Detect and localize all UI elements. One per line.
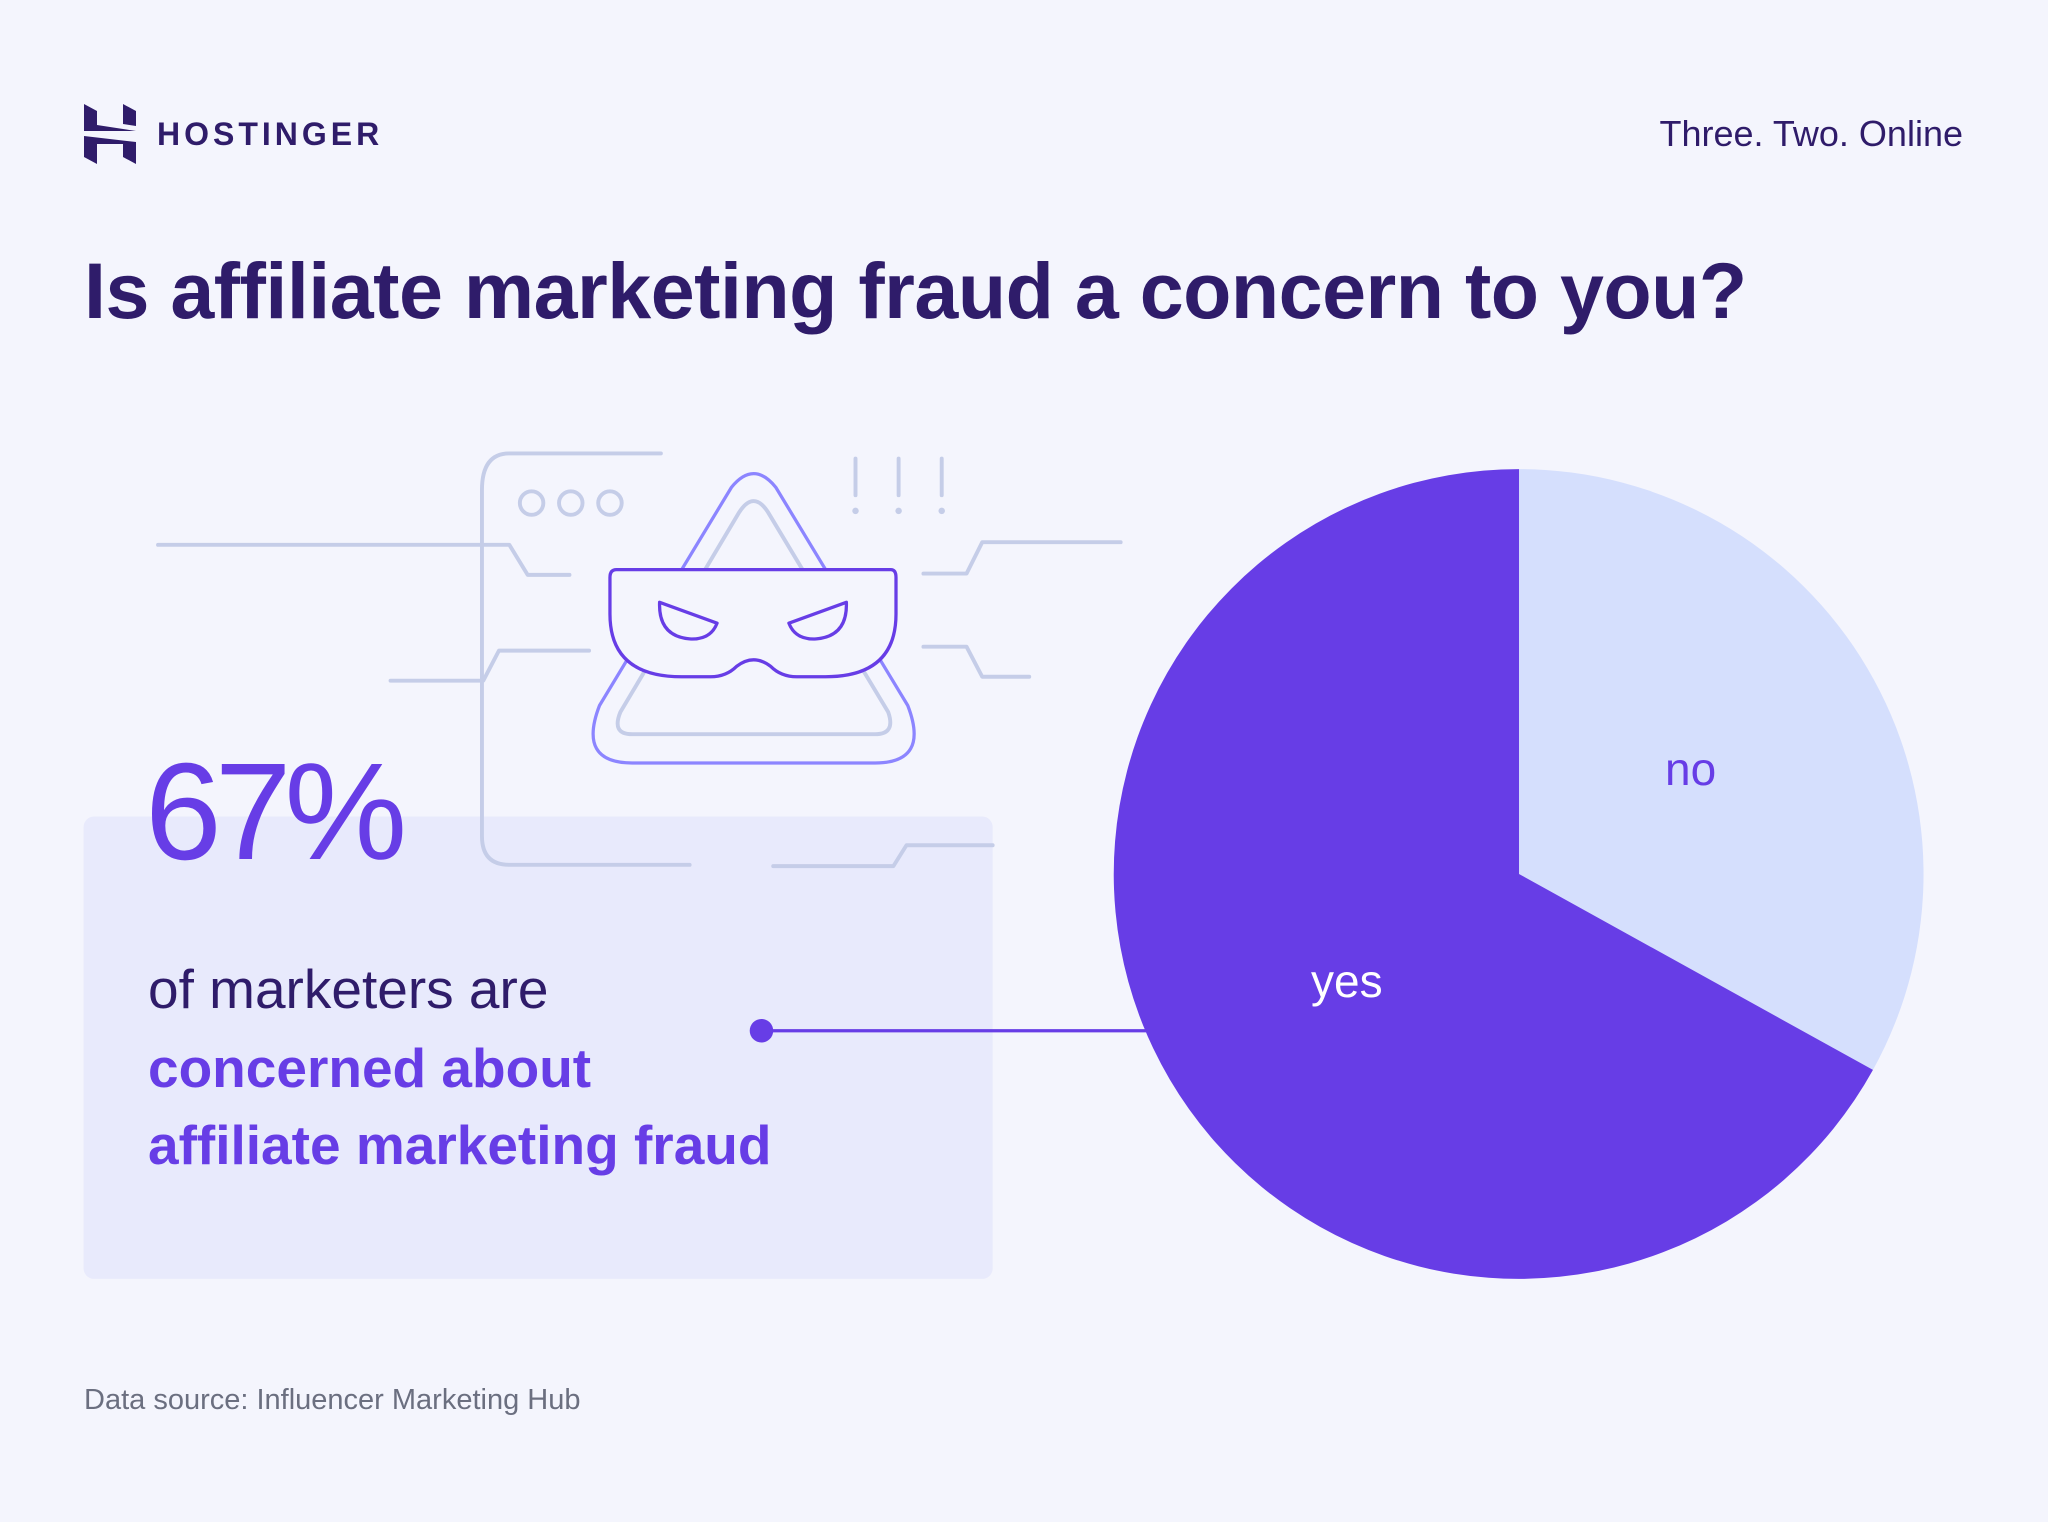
logo: HOSTINGER — [157, 116, 383, 152]
big stat: 67% — [145, 735, 400, 889]
tagline: Three. Two. Online — [1660, 113, 1963, 154]
title: Is affiliate marketing fraud a concern to you? — [84, 246, 1747, 335]
stat description: affiliate marketing fraud — [148, 1114, 771, 1176]
pie chart — [1114, 469, 1924, 1279]
illustration: fraud mask — [158, 453, 1121, 866]
connector line — [750, 1019, 1147, 1042]
pie label: no: no — [1665, 743, 1716, 795]
stat description: concerned about — [148, 1037, 591, 1099]
stat description: of marketers are — [148, 958, 548, 1020]
logo — [84, 104, 383, 164]
pie label: yes: yes — [1311, 955, 1383, 1007]
footer source: Data source: Influencer Marketing Hub — [84, 1384, 580, 1416]
card: stat panel — [84, 817, 993, 1279]
stat description — [148, 958, 771, 1176]
